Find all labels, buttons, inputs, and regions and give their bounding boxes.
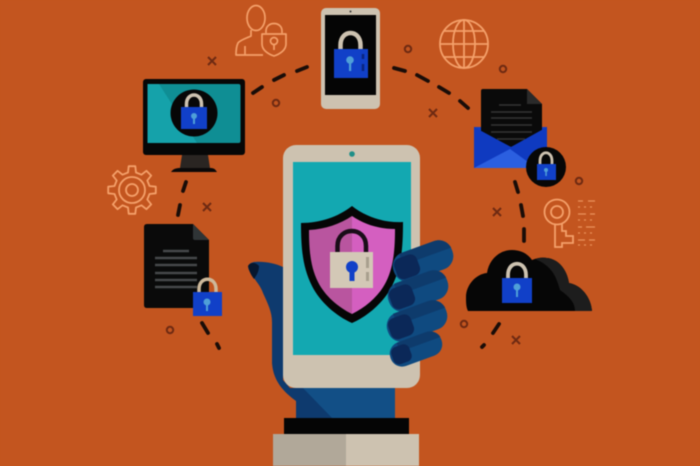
shield padlock — [330, 231, 373, 288]
camera — [349, 151, 355, 157]
dashed connector ring — [178, 67, 524, 348]
screen — [293, 162, 411, 355]
small ring markers — [167, 46, 582, 333]
palm and thumb — [248, 262, 333, 419]
document with padlock — [144, 224, 222, 316]
shirt sleeve — [273, 434, 346, 466]
index finger — [389, 236, 457, 286]
icon: key with code dots — [544, 200, 595, 247]
cuff — [284, 418, 409, 434]
monitor stand — [180, 155, 210, 168]
small phone with padlock — [321, 8, 380, 109]
cloud with padlock — [466, 250, 592, 311]
small cross markers — [203, 57, 520, 344]
hand holding phone — [248, 262, 419, 466]
little finger — [386, 328, 446, 370]
padlock on document — [193, 279, 222, 316]
padlock on cloud — [502, 264, 532, 303]
desktop monitor with padlock — [143, 79, 245, 172]
icon: globe — [440, 20, 488, 68]
middle finger — [384, 266, 452, 316]
envelope with document and padlock — [474, 89, 566, 187]
fingers — [383, 236, 457, 370]
padlock on small phone — [334, 33, 368, 78]
shield — [301, 206, 403, 323]
wrist — [296, 380, 395, 419]
ring finger — [383, 296, 451, 346]
icon: gear — [108, 166, 156, 214]
padlock on monitor — [181, 95, 207, 129]
icon: person with padlock — [236, 6, 286, 56]
padlock on envelope — [537, 153, 556, 180]
main phone — [283, 145, 420, 388]
